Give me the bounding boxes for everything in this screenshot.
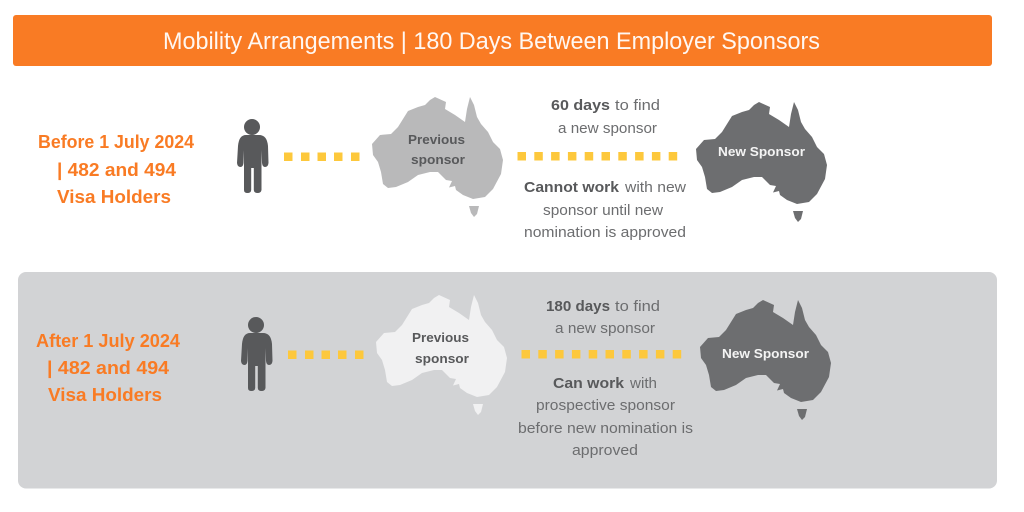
text: can work: with — [629, 375, 657, 392]
text: 180 days to find: a new sponsor — [555, 320, 655, 337]
heading: after 1 July 2024 — [36, 330, 181, 405]
text: cannot work: sponsor until new — [543, 202, 663, 219]
text: can work: Can work — [553, 375, 625, 392]
text: cannot work: Cannot work — [524, 179, 620, 196]
map: previous sponsor — [376, 295, 507, 415]
dotted connector: person to previous sponsor — [284, 152, 360, 161]
icon: person — [237, 119, 268, 193]
text: 60 days to find: to find — [615, 97, 660, 114]
map: new sponsor: New Sponsor — [718, 145, 805, 159]
title banner: Mobility Arrangements | 180 Days Between Employer Sponsors — [163, 28, 820, 55]
heading: after 1 July 2024: Visa Holders — [48, 384, 162, 405]
map: previous sponsor — [372, 97, 503, 217]
text: cannot work: with new — [624, 179, 686, 196]
text: can work — [518, 375, 693, 459]
heading: after 1 July 2024: | 482 and 494 — [47, 357, 170, 378]
text: can work: approved — [572, 442, 638, 459]
text: 180 days to find — [546, 298, 660, 337]
map: previous sponsor: Previous — [408, 133, 465, 147]
text: cannot work: nomination is approved — [524, 224, 686, 241]
dotted connector: previous to new sponsor — [518, 152, 677, 160]
text: cannot work — [524, 179, 686, 241]
text: 60 days to find: 60 days — [551, 97, 610, 114]
text: 60 days to find — [551, 97, 660, 137]
heading: after 1 July 2024: After 1 July 2024 — [36, 330, 181, 351]
text: can work: prospective sponsor — [536, 397, 675, 414]
heading: before 1 July 2024: Before 1 July 2024 — [38, 131, 195, 152]
panel: before 1 July 2024 — [38, 97, 827, 241]
map: previous sponsor: Previous — [412, 331, 469, 345]
map: new sponsor — [700, 300, 831, 420]
dotted connector: person to previous sponsor — [288, 350, 364, 359]
map: previous sponsor: sponsor — [415, 352, 469, 366]
panel: after 1 July 2024 — [18, 272, 997, 488]
text: 180 days to find: to find — [615, 298, 660, 315]
map: previous sponsor: sponsor — [411, 153, 465, 167]
map: new sponsor — [696, 102, 827, 222]
heading: before 1 July 2024: Visa Holders — [57, 186, 171, 207]
heading: before 1 July 2024: | 482 and 494 — [57, 159, 177, 180]
heading: before 1 July 2024 — [38, 131, 195, 207]
map: new sponsor: New Sponsor — [722, 347, 809, 361]
text: can work: before new nomination is — [518, 420, 693, 437]
text: 60 days to find: a new sponsor — [558, 120, 657, 137]
title banner — [13, 15, 992, 66]
icon: person — [241, 317, 272, 391]
dotted connector: previous to new sponsor — [522, 350, 681, 358]
text: 180 days to find: 180 days — [546, 298, 610, 315]
